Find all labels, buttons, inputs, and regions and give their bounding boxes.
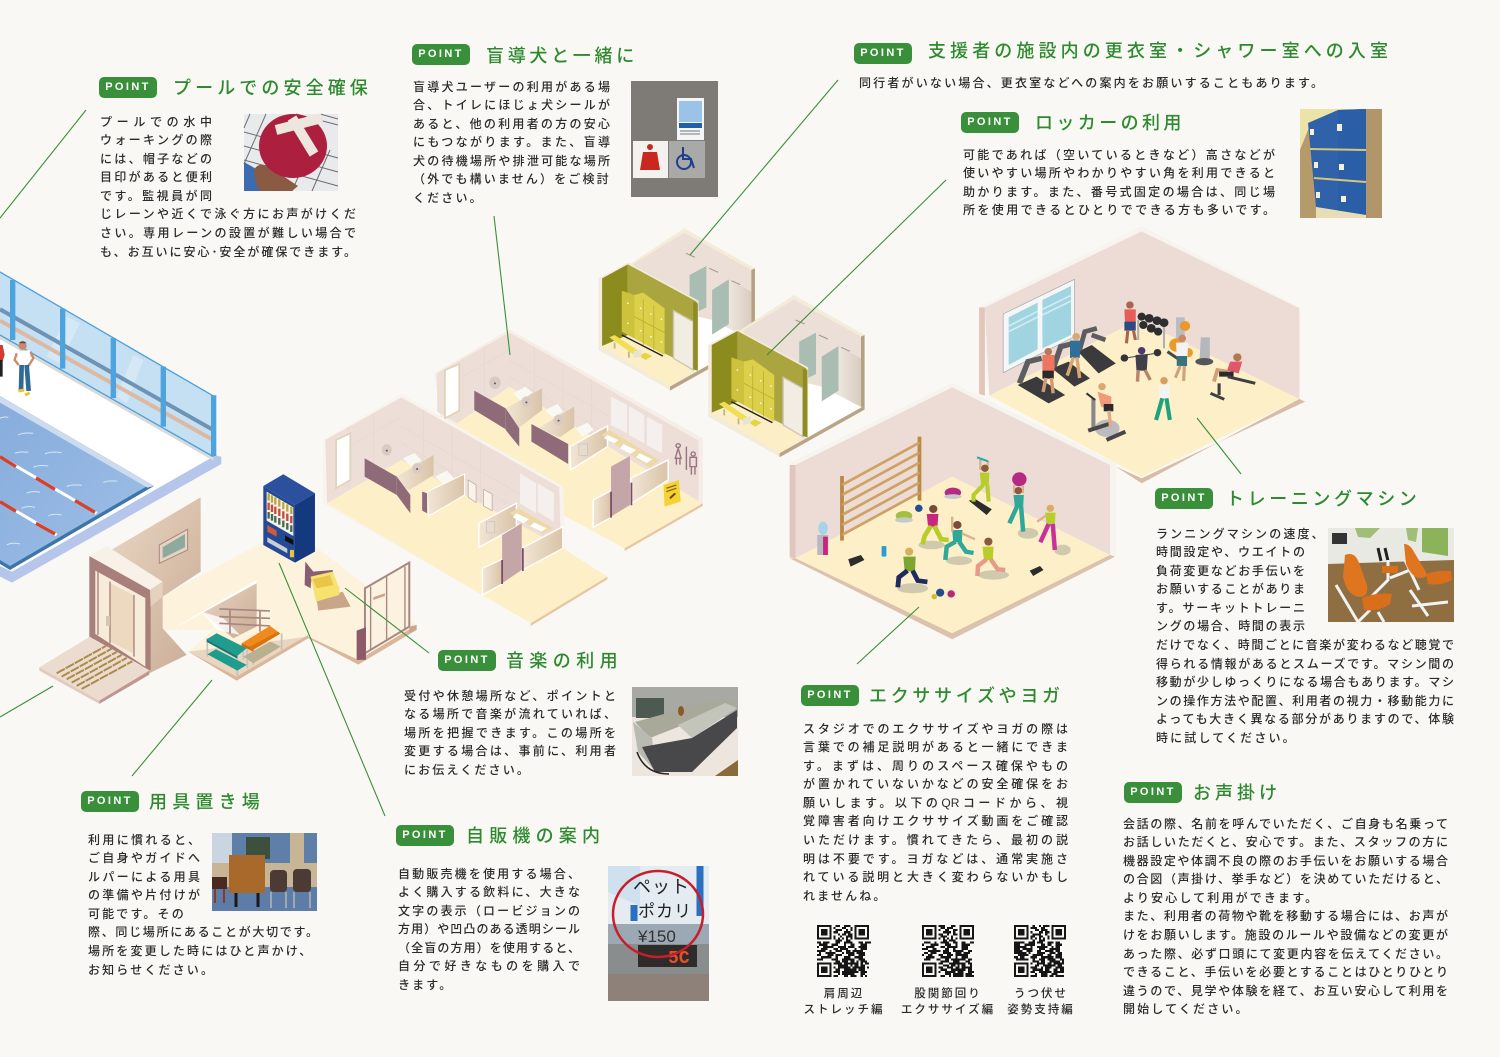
body text: の合図（声掛け、挙手など）を決めていただけると、 — [1123, 872, 1448, 886]
heading: 自販機の案内 — [466, 826, 605, 846]
room: lower restroom — [323, 394, 607, 626]
heading: 支援者の施設内の更衣室・シャワー室への入室 — [928, 41, 1392, 61]
zone: exercise studio — [790, 383, 1116, 639]
point badge — [99, 77, 157, 98]
point badge — [961, 112, 1019, 133]
panel: equipment storage — [81, 791, 318, 977]
heading: ロッカーの利用 — [1035, 113, 1185, 133]
body text: には、帽子などの — [100, 152, 212, 166]
photo: assistance dog sign — [631, 81, 718, 197]
body text: 所を使用できるとひとりでできる方も多いです。 — [963, 203, 1275, 217]
body text — [963, 148, 1275, 217]
icon: exercise props — [848, 488, 1071, 599]
body text: 場所を把握できます。この場所を — [404, 726, 616, 740]
body text: 助かります。また、番号式固定の場合は、同じ場 — [963, 185, 1275, 199]
photo: vending machine label: ポカリ — [638, 897, 692, 922]
heading: お声掛け — [1193, 783, 1281, 803]
body text: 犬の待機場所や排泄可能な場所 — [413, 154, 610, 168]
panel: vending machine guidance — [396, 825, 605, 992]
point badge: POINT — [105, 81, 151, 93]
QR caption: shoulder: 肩周辺 — [824, 988, 864, 1000]
body text: 言葉での補足説明があると一緒にできま — [803, 740, 1068, 754]
body text: あると、他の利用者の方の安心 — [413, 117, 610, 131]
body text: （全盲の方用）を使用すると、 — [398, 941, 580, 955]
body text: よく購入する飲料に、大きな — [398, 885, 580, 899]
QR caption: prone — [1007, 987, 1075, 1016]
body text: なる場所で音楽が流れていれば、 — [404, 707, 616, 721]
body text: 時間設定や、ウエイトの — [1156, 545, 1305, 559]
body text: 明は不要です。ヨガなどは、通常実施さ — [803, 852, 1068, 866]
body text: 時に試してください。 — [1156, 731, 1297, 745]
body text: 可能です。その — [88, 907, 186, 921]
panel: music use — [404, 650, 623, 777]
photo: vending machine label: ¥150 — [637, 927, 676, 946]
body text: も、お互いに安心･安全が確保できます。 — [100, 245, 356, 259]
body text: 受付や休憩場所など、ポイントと — [404, 689, 616, 703]
body text — [100, 115, 356, 259]
body text: きます。 — [398, 978, 453, 992]
heading: 盲導犬と一緒に — [486, 46, 638, 66]
body text: 文字の表示（ロービジョンの — [398, 904, 580, 918]
point badge — [81, 791, 139, 812]
icon: equipment shelves — [207, 626, 282, 676]
point badge: POINT — [87, 795, 133, 807]
point badge — [854, 43, 912, 64]
body text: にもつながります。また、盲導 — [413, 135, 610, 149]
body text: が置かれていないかなどの安全確保をお — [803, 777, 1068, 791]
figure: gym users — [1042, 301, 1255, 427]
point badge: POINT — [418, 48, 464, 60]
body text: れませんね。 — [803, 889, 888, 903]
panel: pool safety — [99, 77, 372, 259]
body text: お話しいただくと、安心です。また、スタッフの方に — [1123, 835, 1448, 849]
body text: 願いします。以下のQRコードから、視 — [803, 796, 1068, 810]
heading: エクササイズやヨガ — [869, 686, 1064, 706]
body text — [88, 833, 318, 977]
icon: weight equipment — [1137, 313, 1213, 365]
body text: 移動が少しゆっくりになる場合もあります。マシ — [1156, 675, 1454, 689]
point badge: POINT — [402, 829, 448, 841]
photo: training machines — [1328, 528, 1454, 622]
body text: 覚障害者向けエクササイズ動画をご確認 — [803, 814, 1068, 828]
body text: 際、同じ場所にあることが大切です。 — [88, 925, 318, 939]
leader lines — [0, 80, 1241, 816]
point badge: POINT — [444, 654, 490, 666]
body text: 方用）や凹凸のある透明シール — [398, 922, 580, 936]
QR code: prone posture — [1014, 925, 1066, 977]
body text: ください。 — [413, 191, 484, 205]
body text: 自分で好きなものを購入で — [398, 959, 580, 973]
point badge — [438, 650, 496, 671]
body text: れている説明と大きく変わらないかもし — [803, 870, 1068, 884]
photo: radio cassette player — [632, 687, 738, 776]
body text — [1156, 527, 1454, 745]
body text: いただけます。慣れてきたら、最初の説 — [803, 833, 1068, 847]
photo: equipment and chairs — [212, 833, 317, 911]
body text: ンの操作方法や配置、利用者の視力・移動能力に — [1156, 694, 1454, 708]
QR caption: hip: 股関節回り — [914, 988, 982, 1000]
icon: restroom pictograms — [675, 444, 696, 475]
zone: swimming pool — [0, 272, 221, 583]
body text: 違うので、見学や体験を経て、お互い安心して利用を — [1123, 984, 1448, 998]
body text: 使いやすい場所やわかりやすい角を利用できると — [963, 166, 1275, 180]
QR code: hip joint exercise — [922, 925, 974, 977]
icon: wet floor sign — [664, 480, 681, 507]
photo: blue lockers — [1300, 109, 1382, 218]
body text — [398, 867, 580, 992]
point badge: POINT — [860, 47, 906, 59]
body text: 開始してください。 — [1123, 1002, 1250, 1016]
body text — [1123, 817, 1448, 1016]
room: upper restroom — [434, 329, 703, 551]
body text: できること、手伝いを必要とすることはひとりひとり — [1123, 965, 1448, 979]
point badge — [1155, 488, 1213, 509]
photo: vending machine label: ペット — [633, 873, 690, 899]
body text: プールでの水中 — [100, 115, 212, 129]
body text: お知らせください。 — [88, 963, 215, 977]
point badge: POINT — [807, 689, 853, 701]
QR caption: hip — [901, 987, 995, 1016]
icon: lobby chair — [305, 562, 351, 611]
body text: 機器設定や体調不良の際のお手伝いをお願いする場合 — [1123, 854, 1448, 868]
QR caption: shoulder: ストレッチ編 — [804, 1004, 884, 1016]
heading: 用具置き場 — [149, 792, 265, 812]
body text — [413, 80, 611, 205]
body text: 得られる情報があるとスムーズです。マシン間の — [1156, 657, 1454, 671]
figure: lifeguard — [0, 341, 33, 395]
point badge — [1124, 782, 1182, 803]
icon: vending machine — [263, 474, 315, 563]
QR caption: hip: エクササイズ編 — [901, 1004, 995, 1016]
body text: だけでなく、時間ごとに音楽が変わるなど聴覚で — [1156, 638, 1454, 652]
heading: プールでの安全確保 — [173, 78, 372, 98]
icon: exercise bike — [1087, 393, 1125, 440]
body text: 会話の際、名前を呼んでいただく、ご自身も名乗って — [1123, 817, 1448, 831]
point badge: POINT — [1130, 786, 1176, 798]
body text: ングの場合、時間の表示 — [1156, 619, 1305, 633]
figure: exercising people — [898, 457, 1056, 587]
panel: training machines — [1155, 488, 1454, 745]
icon: water dispenser — [817, 522, 828, 555]
panel: exercise and yoga — [801, 685, 1068, 903]
QR caption: prone: うつ伏せ — [1014, 988, 1068, 1000]
body text: 目印があると便利 — [100, 170, 212, 184]
body text: 利用に慣れると、 — [88, 833, 200, 847]
body text: また、利用者の荷物や靴を移動する場合には、お声が — [1123, 909, 1448, 923]
body text: 負荷変更などお手伝いを — [1156, 564, 1305, 578]
body text: 自動販売機を使用する場合、 — [398, 867, 580, 881]
photo: vending machine label: 5C — [668, 949, 690, 969]
body text: ランニングマシンの速度、 — [1156, 527, 1326, 541]
point badge — [801, 685, 859, 706]
body text: ウォーキングの際 — [100, 133, 212, 147]
body text: 合、トイレにほじょ犬シールが — [413, 98, 610, 112]
zone: restrooms and locker rooms — [323, 228, 865, 626]
heading: 音楽の利用 — [506, 651, 623, 671]
icon: treadmills — [1018, 328, 1116, 403]
zone: entrance and lobby — [39, 474, 417, 704]
body text: （外でも構いません）をご検討 — [413, 172, 611, 186]
icon: wall bars — [842, 437, 919, 541]
body text: す。まずは、周りのスペース確保やもの — [803, 759, 1068, 773]
room: locker and shower A — [599, 228, 755, 391]
body text: す。サーキットトレーニ — [1156, 601, 1305, 615]
body text: あった際、必ず口頭にて変更内容を伝えてください。 — [1123, 947, 1448, 961]
heading: トレーニングマシン — [1226, 489, 1420, 509]
room: locker and shower B — [708, 295, 865, 457]
body text: さい。専用レーンの設置が難しい場合で — [100, 226, 356, 240]
body text: です。監視員が同 — [100, 189, 212, 203]
point badge — [396, 825, 454, 846]
body text: ご自身やガイドへ — [88, 851, 200, 865]
body text: 盲導犬ユーザーの利用がある場 — [413, 80, 610, 94]
body text: けをお願いします。施設のルールや設備などの変更が — [1123, 928, 1448, 942]
body text: じレーンや近くで泳ぐ方にお声がけくだ — [100, 207, 356, 221]
body text: にお伝えください。 — [404, 763, 531, 777]
body text: 同行者がいない場合、更衣室などへの案内をお願いすることもあります。 — [859, 76, 1323, 90]
body text — [404, 689, 616, 777]
panel: voice calling — [1123, 782, 1448, 1016]
zone: training machine room — [979, 226, 1305, 483]
point badge: POINT — [967, 116, 1013, 128]
QR code: shoulder stretch — [817, 925, 871, 977]
body text: 場所を変更した時にはひと声かけ、 — [88, 944, 313, 958]
body text: より安心して利用ができます。 — [1123, 891, 1319, 905]
body text: 可能であれば（空いているときなど）高さなどが — [963, 148, 1275, 162]
QR caption: shoulder — [804, 988, 884, 1016]
panel: guide dog — [412, 44, 638, 205]
panel: changing room access — [854, 41, 1392, 90]
body text: の準備や片付けが — [88, 888, 200, 902]
body text: 変更する場合は、事前に、利用者 — [404, 744, 616, 758]
icon: entrance door to rooms — [357, 563, 417, 660]
body text: スタジオでのエクササイズやヨガの際は — [803, 722, 1068, 736]
panel: locker use — [961, 112, 1275, 217]
photo: swim cap — [244, 114, 338, 191]
point badge: POINT — [1161, 492, 1207, 504]
body text — [803, 722, 1068, 903]
point badge — [412, 44, 470, 65]
photo: vending machine label — [608, 866, 709, 1001]
body text: ルパーによる用具 — [88, 870, 200, 884]
body text: よっても大きく異なる部分がありますので、体験 — [1156, 712, 1454, 726]
QR caption: prone: 姿勢支持編 — [1007, 1004, 1075, 1016]
body text: お願いすることがありま — [1156, 582, 1305, 596]
